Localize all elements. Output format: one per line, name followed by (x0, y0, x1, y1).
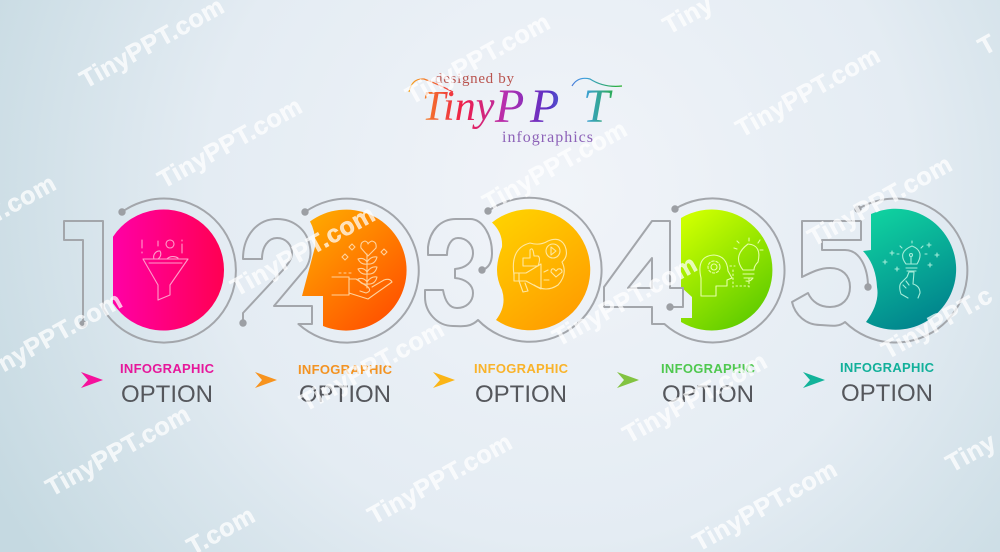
step 1 connector dots (79, 208, 126, 328)
label 3: OPTION (475, 381, 567, 408)
label 4: INFOGRAPHIC (661, 361, 756, 376)
watermarks: T (973, 29, 1000, 61)
arrow 4 (617, 372, 639, 388)
step 5 color disc (863, 209, 956, 330)
step 2 digit outline and ring (243, 199, 419, 343)
label 2: OPTION (299, 381, 391, 408)
icon: hand with plant (332, 241, 392, 299)
watermarks: TinyPPT.com (401, 8, 555, 110)
step 5 (792, 199, 967, 343)
watermarks: TinyPPT.c (877, 281, 997, 365)
step 5 digit outline and ring (792, 199, 967, 343)
watermarks: TinyPPT.com (731, 41, 885, 143)
step 2 connector dots (239, 208, 309, 327)
step 4 (604, 198, 785, 342)
icon: idea bulb and finger (883, 241, 939, 298)
step 4 connector dots (666, 205, 679, 311)
label 1: OPTION (121, 381, 213, 408)
watermarks: TinyPPT.com (41, 400, 195, 502)
logo: Tiny (422, 84, 495, 130)
label 2 (255, 362, 393, 408)
step 4 color disc (681, 210, 772, 330)
icon: marketing megaphone (513, 239, 566, 292)
logo: infographics (502, 129, 593, 146)
arrow 5 (803, 372, 825, 388)
step 3 (425, 198, 602, 342)
step 1 (64, 199, 236, 343)
logo: designed by (435, 71, 514, 87)
label 5: OPTION (841, 380, 933, 407)
label 2: INFOGRAPHIC (298, 362, 393, 377)
watermarks: TinyPPT.com (803, 150, 957, 252)
watermarks: TinyPPT.com (618, 347, 772, 449)
step 1 digit outline and ring (64, 199, 236, 343)
label 3 (433, 361, 569, 408)
arrow 2 (255, 372, 277, 388)
logo (409, 71, 622, 146)
watermarks: Tiny (941, 428, 1000, 478)
step 5 connector dots (854, 205, 872, 291)
step 3 color disc (492, 209, 590, 330)
arrow 3 (433, 372, 455, 388)
step 4 triangle counter (628, 258, 652, 288)
step 3 digit outline and ring (425, 198, 602, 342)
label 1 (81, 361, 215, 408)
label 4: OPTION (662, 381, 754, 408)
step 2 color disc (302, 210, 407, 331)
watermarks: TinyPPT.com (226, 200, 380, 302)
step 2 (239, 199, 419, 343)
watermarks: TinyPPT.com (363, 428, 517, 530)
step 4 digit outline and ring (604, 198, 785, 342)
label 3: INFOGRAPHIC (474, 361, 569, 376)
label 5 (803, 360, 935, 407)
step 1 color disc (113, 209, 224, 330)
logo: PPT (494, 80, 613, 133)
arrow 1 (81, 372, 103, 388)
label 5: INFOGRAPHIC (840, 360, 935, 375)
icon: head with gear and bulb (700, 238, 763, 296)
watermarks: TinyPPT.com (295, 315, 449, 417)
label 4 (617, 361, 756, 408)
icon: funnel (142, 240, 188, 300)
watermarks: TinyPPT.com (153, 92, 307, 194)
watermarks: TinyPPT.com (478, 115, 632, 217)
label 1: INFOGRAPHIC (120, 361, 215, 376)
step 3 connector dots (478, 207, 492, 274)
watermarks: TinyPPT.com (548, 250, 702, 352)
